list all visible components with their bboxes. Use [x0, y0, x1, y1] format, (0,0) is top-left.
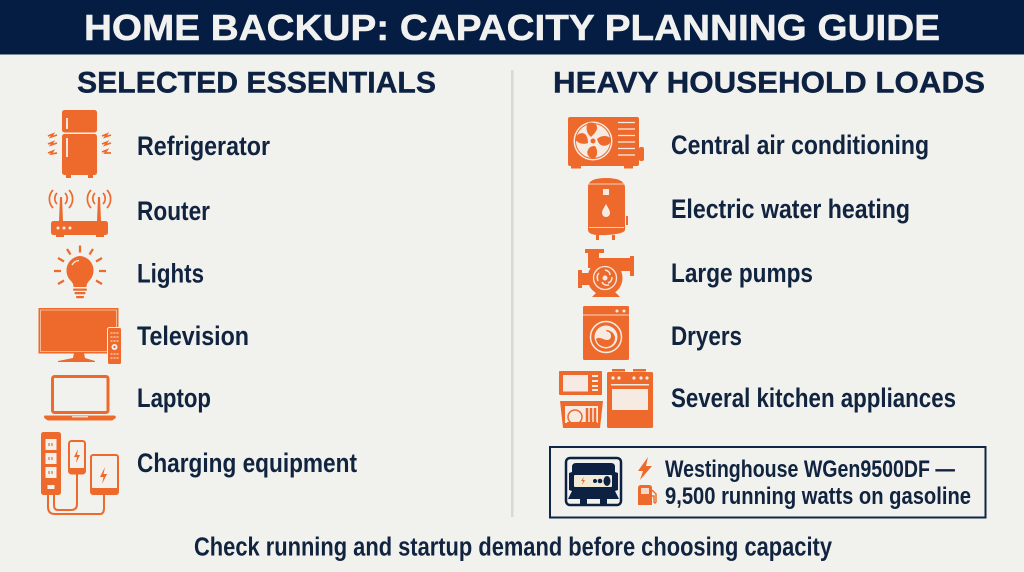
icon: dryer: [583, 306, 629, 360]
text: generator watts: 9,500 running watts on gasoline: [665, 483, 971, 510]
label: large pumps: Large pumps: [671, 258, 813, 288]
icon: light bulb: [54, 246, 106, 298]
label: several kitchen appliances: Several kitchen appliances: [671, 383, 956, 413]
icon: fuel pump: [638, 485, 656, 505]
icon: laptop: [44, 376, 115, 420]
icon: lightning bolt: [638, 457, 652, 480]
label: laptop: Laptop: [137, 383, 211, 413]
heading: heavy household loads: HEAVY HOUSEHOLD LOADS: [553, 66, 985, 100]
callout: generator specification: [550, 447, 986, 518]
icon: electric water heater: [588, 178, 628, 240]
label: central air conditioning: Central air conditioning: [671, 130, 929, 160]
text: generator model: Westinghouse WGen9500DF —: [665, 456, 955, 483]
label: electric water heating: Electric water heating: [671, 194, 910, 224]
label: dryers: Dryers: [671, 321, 742, 351]
panel: heavy household loads: [553, 66, 985, 428]
footer note: Check running and startup demand before choosing capacity: [194, 534, 833, 562]
label: refrigerator: Refrigerator: [137, 131, 270, 161]
title banner: [0, 0, 1024, 54]
icon: television with remote: [39, 308, 122, 364]
label: lights: Lights: [137, 258, 204, 288]
icon: portable generator: [566, 458, 621, 505]
icon: kitchen appliances: [559, 369, 653, 428]
icon: refrigerator: [48, 110, 111, 178]
label: router: Router: [137, 196, 210, 226]
icon: central air conditioner: [568, 117, 644, 168]
heading: selected essentials: SELECTED ESSENTIALS: [77, 66, 436, 100]
title banner: HOME BACKUP: CAPACITY PLANNING GUIDE: [84, 7, 940, 48]
icon: large pump: [578, 249, 634, 297]
label: television: Television: [137, 321, 249, 351]
icon: router: [49, 190, 111, 237]
label: charging equipment: Charging equipment: [137, 448, 357, 478]
panel: selected essentials: [39, 66, 436, 514]
icon: charging equipment: [41, 432, 118, 514]
